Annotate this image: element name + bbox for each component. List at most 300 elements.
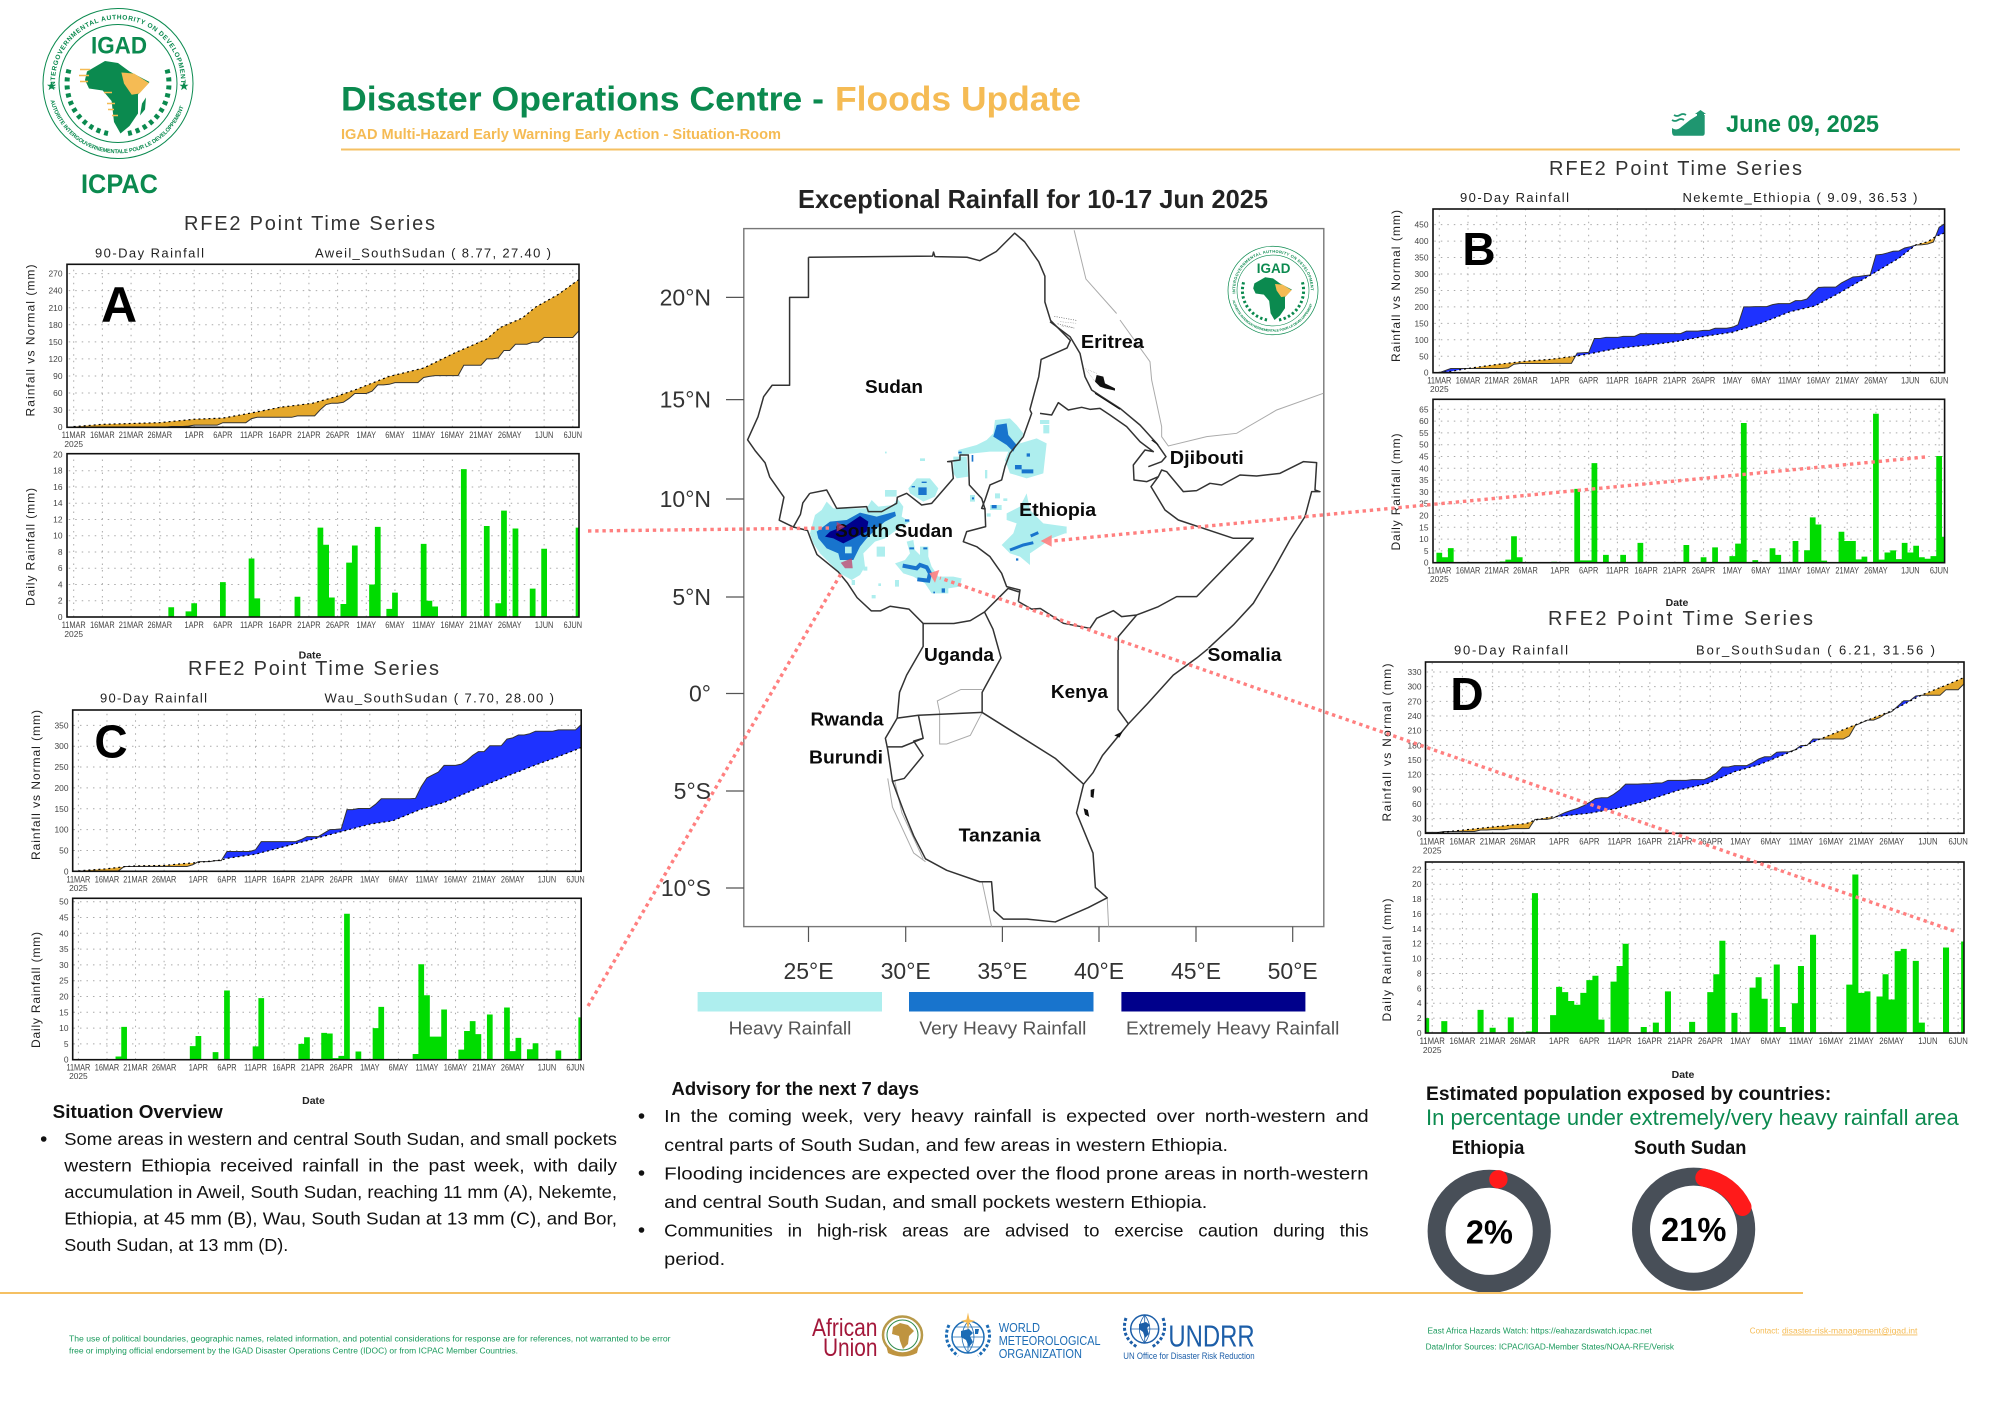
chart C: Wau: 6JUN bbox=[566, 875, 585, 884]
chart B: Nekemte: B bbox=[1462, 223, 1496, 275]
chart B: Nekemte: 11APR bbox=[1606, 376, 1629, 385]
chart D: Bor: 11MAR bbox=[1420, 1035, 1445, 1046]
cumulative rainfall plot B bbox=[1428, 208, 1956, 373]
chart C: Wau: 50 bbox=[59, 897, 69, 907]
logo: World Meteorological Organization bbox=[946, 1312, 1101, 1361]
chart B: Nekemte: 11MAY bbox=[1778, 566, 1802, 575]
logo: World Meteorological Organization: ORGANIZATION bbox=[999, 1347, 1082, 1361]
daily rainfall bars C bbox=[67, 895, 593, 1060]
donut: Ethiopia 2% bbox=[1437, 1170, 1542, 1284]
latitude labels: 15°N bbox=[660, 386, 711, 412]
chart C: Wau: 6APR bbox=[217, 1063, 237, 1072]
chart B: Nekemte: 26MAY bbox=[1864, 566, 1888, 575]
chart C: Wau: 26MAR bbox=[152, 1063, 176, 1072]
chart D: Bor: 1MAY bbox=[1730, 1035, 1751, 1046]
chart D: Bor: 8 bbox=[1417, 968, 1422, 978]
chart B: Nekemte: Nekemte_Ethiopia ( 9.09, 36.53 ) bbox=[1682, 190, 1918, 205]
chart B: Nekemte: 350 bbox=[1415, 253, 1429, 263]
footer contact: Contact: bbox=[1750, 1326, 1780, 1336]
chart B: Nekemte: 16MAY bbox=[1807, 566, 1831, 575]
chart A: Aweil: RFE2 Point Time Series bbox=[184, 213, 435, 235]
chart C: Wau: Wau_SouthSudan ( 7.70, 28.00 ) bbox=[324, 690, 554, 706]
chart C: Wau: 40 bbox=[59, 928, 69, 938]
chart C: Wau: RFE2 Point Time Series bbox=[188, 658, 439, 680]
chart D: Bor: 6MAY bbox=[1760, 1035, 1781, 1046]
chart C: Wau: 16MAY bbox=[444, 1063, 468, 1072]
chart C: Wau: 10 bbox=[59, 1023, 69, 1033]
chart B: Nekemte: 20 bbox=[1419, 510, 1429, 520]
chart A: Aweil: 8 bbox=[58, 547, 63, 557]
logo: IGAD emblem: IGAD bbox=[91, 32, 147, 60]
logo: UNDRR bbox=[1123, 1315, 1255, 1361]
chart B: Nekemte: 30 bbox=[1419, 487, 1429, 497]
chart C: Wau: 45 bbox=[59, 912, 69, 922]
chart D: Bor: 6 bbox=[1417, 983, 1422, 993]
chart A: Aweil: 16APR bbox=[269, 620, 292, 630]
chart C: Wau: 16APR bbox=[272, 1063, 296, 1072]
chart A: Aweil: 16MAR bbox=[90, 430, 115, 440]
chart B: Nekemte: 400 bbox=[1415, 236, 1429, 246]
chart D: Bor: 16 bbox=[1412, 909, 1422, 919]
chart A: Aweil: 180 bbox=[49, 320, 63, 330]
chart B: Nekemte: 16MAR bbox=[1456, 566, 1480, 575]
chart A: Aweil: 240 bbox=[49, 286, 63, 296]
chart A: Aweil: 1APR bbox=[185, 620, 204, 630]
cumulative rainfall plot A bbox=[68, 270, 578, 426]
chart C: Wau: 0 bbox=[64, 1055, 69, 1065]
chart B: Nekemte: 1JUN bbox=[1901, 376, 1920, 385]
latitude labels: 5°S bbox=[674, 778, 711, 804]
chart D: Bor: 240 bbox=[1408, 711, 1422, 721]
chart A: Aweil: 0 bbox=[58, 612, 63, 622]
country labels bbox=[809, 331, 1282, 846]
chart A: Aweil: 16MAR bbox=[90, 620, 115, 630]
panel: advisory: Advisory for the next 7 days bbox=[672, 1078, 919, 1099]
panel: estimated population exposed: In percentage under extremely/very heavy rainfall area bbox=[1426, 1105, 1959, 1130]
chart A: Aweil: 11MAR bbox=[62, 430, 86, 440]
chart A: Aweil: 6 bbox=[58, 563, 63, 573]
chart D: Bor: 16APR bbox=[1638, 836, 1662, 846]
country labels: Sudan bbox=[865, 376, 923, 397]
country labels: Djibouti bbox=[1170, 447, 1244, 468]
country labels: Burundi bbox=[809, 746, 883, 768]
chart D: Bor: 6APR bbox=[1579, 1035, 1599, 1046]
chart C: Wau: 21APR bbox=[301, 1063, 324, 1072]
footer sources: Data/Infor Sources: ICPAC/IGAD-Member States/NOAA-RFE/Verisk bbox=[1426, 1342, 1675, 1352]
chart A: Aweil: 90 bbox=[53, 371, 63, 381]
footer disclaimer: free or implying official endorsement by the IGAD Disaster Operations Centre (IDOC) or from ICPAC Member Countries. bbox=[69, 1346, 518, 1356]
arrow: chart B to Nekemte bbox=[1041, 457, 1925, 547]
chart B: Nekemte: 16APR bbox=[1634, 566, 1658, 575]
chart C: Wau: 16MAR bbox=[95, 1063, 119, 1072]
chart C: Wau: 15 bbox=[59, 1007, 69, 1017]
small IGAD logo on map: AUTORITE INTERGOUVERNEMENTALE POUR LE DEVELOPPEMENT bbox=[1232, 300, 1312, 332]
chart C: Wau: 11MAY bbox=[415, 875, 439, 884]
chart A: Aweil: 12 bbox=[53, 514, 63, 524]
chart A: Aweil: 26APR bbox=[326, 620, 349, 630]
chart D: Bor bbox=[1380, 608, 1976, 1081]
country labels: Somalia bbox=[1208, 644, 1282, 665]
chart D: Bor: 21APR bbox=[1668, 1035, 1692, 1046]
donut: South Sudan 21% bbox=[1641, 1177, 1746, 1282]
chart D: Bor: 180 bbox=[1408, 740, 1422, 750]
chart A: Aweil: 21APR bbox=[297, 430, 321, 440]
chart B: Nekemte: 1APR bbox=[1550, 376, 1570, 385]
chart A: Aweil: 11APR bbox=[240, 430, 263, 440]
chart A: Aweil: 6MAY bbox=[385, 620, 405, 630]
chart A: Aweil: 14 bbox=[53, 498, 63, 508]
logo: IGAD emblem bbox=[42, 8, 194, 159]
chart C: Wau: 21MAY bbox=[472, 1063, 496, 1072]
chart C: Wau: 25 bbox=[59, 976, 69, 986]
chart A: Aweil: 60 bbox=[53, 388, 63, 398]
chart B: Nekemte: 21APR bbox=[1663, 566, 1687, 575]
chart A: Aweil: Date bbox=[299, 650, 322, 662]
chart A: Aweil: 20 bbox=[53, 450, 63, 460]
chart A: Aweil: 26MAY bbox=[498, 620, 522, 630]
chart B: Nekemte: 60 bbox=[1419, 416, 1429, 426]
map title: Exceptional Rainfall for 10-17 Jun 2025 bbox=[798, 184, 1268, 214]
donut: Ethiopia 2%: 2% bbox=[1466, 1214, 1513, 1250]
panel: situation overview: Situation Overview bbox=[53, 1101, 223, 1122]
logo label: ICPAC: ICPAC bbox=[81, 169, 158, 199]
chart C: Wau: 6JUN bbox=[566, 1063, 585, 1072]
chart A: Aweil: 26MAY bbox=[498, 430, 522, 440]
chart D: Bor: 18 bbox=[1412, 894, 1422, 904]
chart A: Aweil: 16 bbox=[53, 482, 63, 492]
chart C: Wau: 21MAR bbox=[123, 1063, 148, 1072]
longitude labels: 30°E bbox=[881, 958, 931, 984]
title: green part: Disaster Operations Centre - bbox=[341, 80, 824, 118]
chart A: Aweil: 11MAY bbox=[412, 620, 436, 630]
chart B: Nekemte: 15 bbox=[1419, 522, 1429, 532]
chart D: Bor: 60 bbox=[1412, 799, 1422, 809]
country labels: Eritrea bbox=[1081, 331, 1145, 352]
chart D: Bor: 21MAY bbox=[1849, 836, 1874, 846]
arrow: chart A to Aweil bbox=[588, 522, 845, 532]
chart C: Wau: 250 bbox=[55, 762, 69, 772]
map latitude and longitude ticks bbox=[726, 297, 1293, 942]
panel: situation overview: Some areas in western and central South Sudan, and small pockets bbox=[64, 1129, 617, 1149]
chart C: Wau: 150 bbox=[55, 804, 69, 814]
chart B: Nekemte: 2025 bbox=[1430, 384, 1449, 394]
chart B: Nekemte: 1JUN bbox=[1901, 566, 1920, 575]
chart A: Aweil: 1JUN bbox=[535, 430, 553, 440]
chart C: Wau: 26APR bbox=[330, 875, 353, 884]
logo: African Union: African bbox=[812, 1314, 878, 1342]
chart C: Wau: 21MAY bbox=[472, 875, 496, 884]
chart A: Aweil: 90-Day Rainfall bbox=[95, 246, 204, 260]
daily rainfall bars A bbox=[68, 460, 578, 616]
chart D: Bor: 90 bbox=[1412, 784, 1422, 794]
chart B: Nekemte: 2025 bbox=[1430, 574, 1449, 584]
footer sources: East Africa Hazards Watch: https://eahazardswatch.icpac.net bbox=[1428, 1326, 1652, 1336]
icon: coastal flood lighthouse bbox=[1672, 110, 1706, 136]
latitude labels: 0° bbox=[689, 680, 711, 706]
chart A: Aweil: 0 bbox=[58, 422, 63, 432]
chart B: Nekemte: 5 bbox=[1424, 546, 1429, 556]
small IGAD logo on map: IGAD bbox=[1257, 261, 1290, 277]
chart D: Bor: 21MAY bbox=[1849, 1035, 1874, 1046]
chart B: Nekemte: RFE2 Point Time Series bbox=[1549, 158, 1802, 180]
chart A: Aweil: 6MAY bbox=[385, 430, 405, 440]
panel: advisory: central parts of South Sudan, and few areas in western Ethiopia. bbox=[664, 1135, 1228, 1155]
chart A: Aweil bbox=[24, 213, 590, 662]
chart A: Aweil: 4 bbox=[58, 580, 63, 590]
country labels: Ethiopia bbox=[1019, 499, 1097, 520]
chart D: Bor: 1MAY bbox=[1730, 836, 1751, 846]
chart A: Aweil: 2025 bbox=[64, 439, 83, 449]
chart D: Bor: 26MAR bbox=[1510, 836, 1536, 846]
chart A: Aweil: 16MAY bbox=[441, 620, 465, 630]
chart B: Nekemte: 200 bbox=[1415, 302, 1429, 312]
country labels: Tanzania bbox=[959, 824, 1041, 846]
chart C: Wau: 1MAY bbox=[360, 875, 380, 884]
chart D: Bor: 21MAR bbox=[1480, 1035, 1506, 1046]
chart C: Wau: 90-Day Rainfall bbox=[100, 690, 207, 706]
chart C: Wau: 50 bbox=[59, 846, 69, 856]
chart C: Wau: 35 bbox=[59, 944, 69, 954]
chart A: Aweil: 26MAR bbox=[147, 430, 172, 440]
panel: situation overview: accumulation in Aweil, South Sudan, reaching 11 mm (A), Nekemte, bbox=[64, 1182, 617, 1202]
chart D: Bor: 6JUN bbox=[1948, 836, 1968, 846]
chart B: Nekemte: 26MAR bbox=[1513, 376, 1538, 385]
chart D: Bor: 90-Day Rainfall bbox=[1454, 642, 1568, 658]
legend: rainfall classes: Very Heavy Rainfall bbox=[919, 1018, 1086, 1038]
chart C: Wau: 26APR bbox=[330, 1063, 353, 1072]
chart B: Nekemte: 6JUN bbox=[1930, 376, 1948, 385]
chart D: Bor: 12 bbox=[1412, 939, 1422, 949]
chart C: Wau: 1JUN bbox=[538, 875, 556, 884]
chart A: Aweil: 2025 bbox=[64, 629, 83, 639]
date: June 09, 2025 bbox=[1726, 111, 1879, 138]
chart A: Aweil: 21APR bbox=[297, 620, 321, 630]
cumulative rainfall plot C bbox=[67, 704, 593, 871]
chart B: Nekemte: 50 bbox=[1419, 440, 1429, 450]
footer rule bbox=[0, 1292, 1803, 1294]
chart B: Nekemte: 6MAY bbox=[1751, 566, 1771, 575]
chart D: Bor: 2 bbox=[1417, 1013, 1422, 1023]
chart C: Wau: 11MAR bbox=[66, 1063, 90, 1072]
chart D: Bor: 2025 bbox=[1423, 846, 1442, 856]
small IGAD logo on map: INTERGOVERNMENTAL AUTHORITY ON DEVELOPMENT bbox=[1232, 250, 1314, 294]
footer disclaimer bbox=[69, 1334, 671, 1356]
chart D: Bor: 26MAY bbox=[1879, 836, 1904, 846]
chart B: Nekemte: Date bbox=[1666, 597, 1689, 609]
chart B: Nekemte: 10 bbox=[1419, 534, 1429, 544]
chart D: Bor: 6APR bbox=[1579, 836, 1599, 846]
chart B: Nekemte: Daily Rainfall (mm) bbox=[1389, 434, 1403, 550]
chart D: Bor: 11APR bbox=[1608, 836, 1632, 846]
chart B: Nekemte: 100 bbox=[1415, 335, 1429, 345]
chart B: Nekemte: 21MAR bbox=[1484, 566, 1509, 575]
chart B: Nekemte: 16MAY bbox=[1807, 376, 1831, 385]
chart C: Wau: 2025 bbox=[69, 883, 88, 893]
chart B: Nekemte: 11MAR bbox=[1427, 566, 1451, 575]
latitude labels: 10°S bbox=[661, 875, 711, 901]
chart A: Aweil: 26APR bbox=[326, 430, 349, 440]
chart B: Nekemte: 250 bbox=[1415, 286, 1429, 296]
chart B: Nekemte: 16APR bbox=[1634, 376, 1658, 385]
panel: situation overview: South Sudan, at 13 mm (D). bbox=[64, 1235, 288, 1255]
chart A: Aweil: Rainfall vs Normal (mm) bbox=[24, 264, 38, 416]
chart A: Aweil: 30 bbox=[53, 405, 63, 415]
chart A: Aweil: 6JUN bbox=[564, 430, 582, 440]
chart A: Aweil: 1MAY bbox=[357, 620, 377, 630]
chart C: Wau: 1MAY bbox=[360, 1063, 380, 1072]
chart D: Bor: 16MAY bbox=[1819, 836, 1844, 846]
chart A: Aweil: 11APR bbox=[240, 620, 263, 630]
arrow: chart D to Bor bbox=[929, 570, 1954, 931]
cumulative rainfall plot D bbox=[1420, 657, 1976, 833]
chart B: Nekemte: 21MAY bbox=[1835, 376, 1859, 385]
chart D: Bor: 2025 bbox=[1423, 1045, 1442, 1055]
chart D: Bor: 11MAY bbox=[1789, 1035, 1813, 1046]
legend: rainfall classes: Heavy Rainfall bbox=[729, 1018, 851, 1038]
logo: World Meteorological Organization: METEOROLOGICAL bbox=[999, 1334, 1101, 1348]
chart D: Bor: 1JUN bbox=[1918, 1035, 1938, 1046]
chart C: Wau: Rainfall vs Normal (mm) bbox=[29, 710, 43, 860]
chart B: Nekemte: 0 bbox=[1424, 558, 1429, 568]
chart B: Nekemte: 6MAY bbox=[1751, 376, 1771, 385]
chart B: Nekemte: 25 bbox=[1419, 499, 1429, 509]
chart B: Nekemte: 21MAY bbox=[1835, 566, 1859, 575]
chart A: Aweil: Daily Rainfall (mm) bbox=[24, 488, 38, 606]
chart A: Aweil: 21MAR bbox=[119, 430, 143, 440]
chart B: Nekemte: 45 bbox=[1419, 452, 1429, 462]
logo: African Union bbox=[812, 1314, 922, 1362]
chart C: Wau: 26MAR bbox=[152, 875, 176, 884]
chart B: Nekemte: 26MAR bbox=[1513, 566, 1538, 575]
chart D: Bor: 26MAY bbox=[1879, 1035, 1904, 1046]
chart D: Bor: 10 bbox=[1412, 954, 1422, 964]
chart C: Wau: 6MAY bbox=[389, 875, 409, 884]
chart C: Wau: 21MAR bbox=[123, 875, 148, 884]
chart C: Wau: 100 bbox=[55, 825, 69, 835]
chart B: Nekemte: 1MAY bbox=[1723, 376, 1743, 385]
panel: advisory: and central South Sudan, and small pockets western Ethiopia. bbox=[664, 1192, 1207, 1212]
chart D: Bor: Bor_SouthSudan ( 6.21, 31.56 ) bbox=[1696, 642, 1935, 658]
arrow: chart C to Wau bbox=[588, 558, 853, 1006]
panel: situation overview: Ethiopia, at 45 mm (B), Wau, South Sudan at 13 mm (C), and Bor, bbox=[64, 1208, 617, 1228]
chart A: Aweil: 10 bbox=[53, 531, 63, 541]
chart C: Wau: 16MAY bbox=[444, 875, 468, 884]
chart D: Bor: 330 bbox=[1408, 667, 1422, 677]
map: exceptional rainfall over East Africa bbox=[660, 228, 1324, 984]
chart A: Aweil: Aweil_SouthSudan ( 8.77, 27.40 ) bbox=[315, 246, 551, 260]
chart D: Bor: 210 bbox=[1408, 726, 1422, 736]
daily rainfall bars D bbox=[1420, 854, 1976, 1033]
chart D: Bor: 21MAR bbox=[1480, 836, 1506, 846]
chart D: Bor: 16MAR bbox=[1450, 836, 1475, 846]
chart B: Nekemte: 0 bbox=[1424, 368, 1429, 378]
footer sources bbox=[1426, 1326, 1675, 1352]
chart D: Bor: 6JUN bbox=[1948, 1035, 1968, 1046]
logo: UNDRR: UNDRR bbox=[1168, 1318, 1255, 1354]
chart D: Bor: 120 bbox=[1408, 770, 1422, 780]
panel: advisory: In the coming week, very heavy rainfall is expected over north-western and bbox=[664, 1106, 1369, 1126]
chart D: Bor: 30 bbox=[1412, 814, 1422, 824]
country labels: Rwanda bbox=[810, 708, 884, 730]
panel: advisory: Communities in high-risk areas are advised to exercise caution during this bbox=[664, 1220, 1369, 1240]
chart C: Wau bbox=[29, 658, 593, 1107]
subtitle: IGAD Multi-Hazard Early Warning Early Action - Situation-Room bbox=[341, 127, 781, 143]
longitude labels: 40°E bbox=[1074, 958, 1124, 984]
chart D: Bor: 16MAY bbox=[1819, 1035, 1844, 1046]
chart A: Aweil: 16APR bbox=[269, 430, 292, 440]
chart D: Bor: 11MAR bbox=[1420, 836, 1445, 846]
chart C: Wau: 6MAY bbox=[389, 1063, 409, 1072]
chart D: Bor: 21APR bbox=[1668, 836, 1692, 846]
chart C: Wau: 11APR bbox=[244, 875, 267, 884]
latitude labels: 20°N bbox=[660, 284, 711, 310]
chart D: Bor: 16APR bbox=[1638, 1035, 1662, 1046]
panel: estimated population exposed: Estimated population exposed by countries: bbox=[1426, 1084, 1831, 1105]
chart C: Wau: 6APR bbox=[217, 875, 237, 884]
chart D: Bor: 300 bbox=[1408, 682, 1422, 692]
small IGAD logo on map bbox=[1228, 246, 1318, 336]
panel: estimated population exposed bbox=[1426, 1084, 1959, 1284]
chart C: Wau: 5 bbox=[64, 1039, 69, 1049]
chart D: Bor: 26APR bbox=[1698, 1035, 1723, 1046]
chart C: Wau: 21APR bbox=[301, 875, 324, 884]
chart B: Nekemte: 35 bbox=[1419, 475, 1429, 485]
chart A: Aweil: 11MAR bbox=[62, 620, 86, 630]
chart D: Bor: D bbox=[1450, 668, 1484, 720]
logo: African Union: Union bbox=[823, 1334, 878, 1362]
chart B: Nekemte: 26APR bbox=[1692, 566, 1715, 575]
chart C: Wau: 16APR bbox=[272, 875, 296, 884]
chart D: Bor: 26MAR bbox=[1510, 1035, 1536, 1046]
chart A: Aweil: 11MAY bbox=[412, 430, 436, 440]
chart D: Bor: 1JUN bbox=[1918, 836, 1938, 846]
chart C: Wau: 1JUN bbox=[538, 1063, 556, 1072]
panel: advisory: Flooding incidences are expected over the flood prone areas in north-western bbox=[664, 1164, 1369, 1184]
chart D: Bor: 4 bbox=[1417, 998, 1422, 1008]
chart D: Bor: Date bbox=[1672, 1069, 1695, 1081]
chart A: Aweil: 2 bbox=[58, 596, 63, 606]
chart D: Bor: Daily Rainfall (mm) bbox=[1380, 898, 1394, 1022]
chart D: Bor: 6MAY bbox=[1760, 836, 1781, 846]
chart C: Wau: 30 bbox=[59, 960, 69, 970]
chart D: Bor: Rainfall vs Normal (mm) bbox=[1380, 664, 1394, 822]
chart A: Aweil: 1APR bbox=[185, 430, 204, 440]
panel: advisory bbox=[639, 1078, 1369, 1269]
chart B: Nekemte: Rainfall vs Normal (mm) bbox=[1389, 210, 1403, 362]
chart D: Bor: RFE2 Point Time Series bbox=[1548, 608, 1813, 630]
chart D: Bor: 11MAY bbox=[1789, 836, 1813, 846]
chart B: Nekemte: 300 bbox=[1415, 269, 1429, 279]
chart B: Nekemte: 11MAR bbox=[1427, 376, 1451, 385]
chart C: Wau: C bbox=[94, 716, 128, 768]
chart D: Bor: 20 bbox=[1412, 879, 1422, 889]
title: gold part: Floods Update bbox=[835, 80, 1081, 118]
header rule bbox=[341, 148, 1960, 150]
chart B: Nekemte: 450 bbox=[1415, 220, 1429, 230]
chart C: Wau: 300 bbox=[55, 741, 69, 751]
chart A: Aweil: 1JUN bbox=[535, 620, 553, 630]
longitude labels: 25°E bbox=[783, 958, 834, 984]
chart C: Wau: 11MAY bbox=[415, 1063, 439, 1072]
chart C: Wau: 200 bbox=[55, 783, 69, 793]
chart D: Bor: 11APR bbox=[1608, 1035, 1632, 1046]
chart D: Bor: 26APR bbox=[1698, 836, 1723, 846]
chart B: Nekemte: 65 bbox=[1419, 404, 1429, 414]
chart C: Wau: 1APR bbox=[189, 1063, 208, 1072]
logo: World Meteorological Organization: WORLD bbox=[999, 1321, 1040, 1335]
chart C: Wau: 0 bbox=[64, 866, 69, 876]
logo: UNDRR: UN Office for Disaster Risk Reduction bbox=[1123, 1351, 1255, 1361]
